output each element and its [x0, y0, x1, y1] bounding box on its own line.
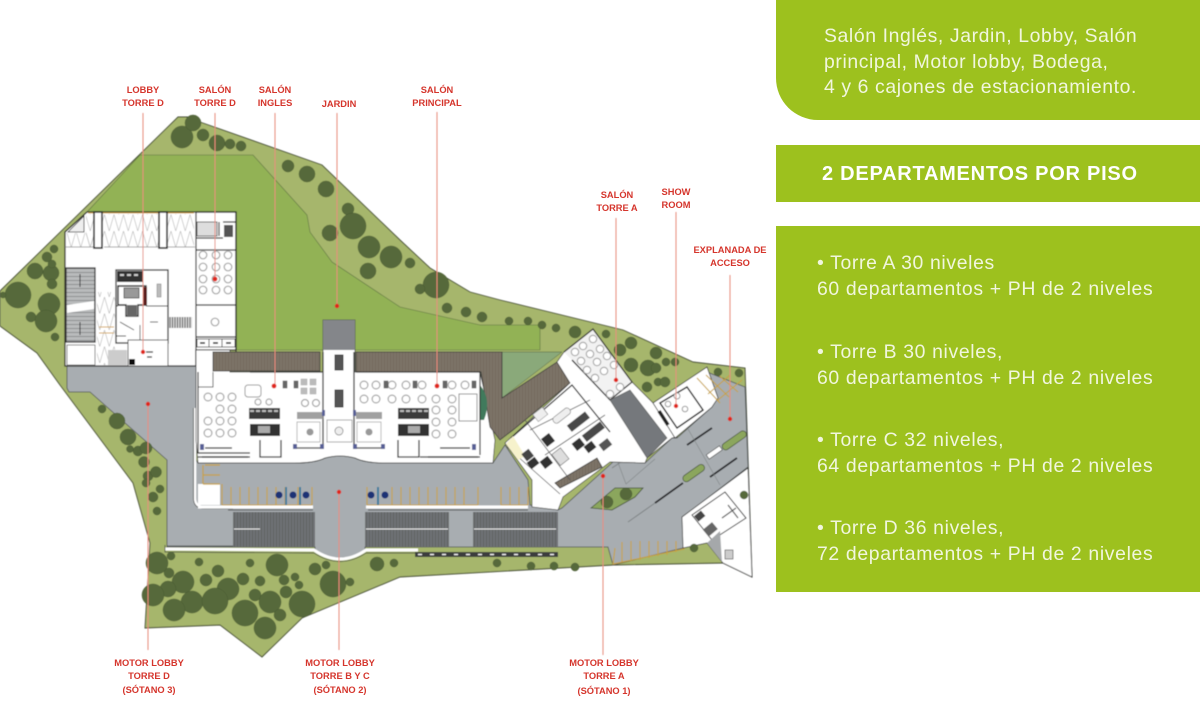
- south-east building: [682, 468, 752, 577]
- leader lines: [143, 112, 730, 655]
- label: motor lobby torre B y C: (SÓTANO 2): [313, 684, 367, 695]
- tower A: 60 departamentos + PH de 2 niveles: [817, 278, 1153, 300]
- lawn: east patch: [502, 352, 562, 398]
- label: motor lobby torre D: (SÓTANO 3): [122, 684, 176, 695]
- amenities text: Salón Inglés, Jardin, Lobby, Salón: [824, 25, 1137, 47]
- central building: [196, 320, 570, 463]
- tower D: 72 departamentos + PH de 2 niveles: [817, 543, 1153, 565]
- heading band: [776, 145, 1200, 202]
- plan labels: [114, 84, 767, 696]
- label: lobby torre D: LOBBY: [127, 85, 159, 95]
- label: salon ingles: SALÓN: [259, 85, 291, 95]
- label: motor lobby torre B y C: MOTOR LOBBY: [305, 658, 375, 668]
- label: salon principal: PRINCIPAL: [412, 98, 462, 108]
- parking bands: [198, 415, 737, 564]
- show room building: [653, 367, 742, 438]
- amenities text: 4 y 6 cajones de estacionamiento.: [824, 76, 1137, 98]
- panel: amenities: [776, 0, 1200, 120]
- lawn: jardin: [87, 155, 540, 350]
- label: motor lobby torre D: TORRE D: [128, 671, 170, 681]
- road and parking pavement: [67, 366, 748, 565]
- label: show room: ROOM: [662, 200, 691, 210]
- label: show room: SHOW: [662, 187, 690, 197]
- heading text: 2 DEPARTAMENTOS POR PISO: [822, 163, 1138, 185]
- label: salon torre D: SALÓN: [199, 85, 231, 95]
- label: motor lobby torre B y C: TORRE B Y C: [310, 671, 370, 681]
- label: explanada de acceso: ACCESO: [710, 258, 750, 268]
- label: salon torre A: SALÓN: [601, 190, 633, 200]
- label: motor lobby torre A: MOTOR LOBBY: [569, 658, 639, 668]
- tower B: [817, 341, 1153, 389]
- label: salon ingles: INGLES: [258, 98, 292, 108]
- tower C: 64 departamentos + PH de 2 niveles: [817, 455, 1153, 477]
- tower D: • Torre D 36 niveles,: [817, 517, 1004, 539]
- site plan: [0, 84, 767, 696]
- tower B: • Torre B 30 niveles,: [817, 341, 1003, 363]
- label: motor lobby torre A: TORRE A: [583, 671, 625, 681]
- label: salon torre D: TORRE D: [194, 98, 236, 108]
- trees: [0, 115, 748, 639]
- panel: towers: [776, 226, 1200, 592]
- tower D building: [65, 212, 236, 366]
- amenities text: [824, 25, 1137, 98]
- tower C: [817, 429, 1153, 477]
- label: salon principal: SALÓN: [421, 85, 453, 95]
- tower C: • Torre C 32 niveles,: [817, 429, 1004, 451]
- label: motor lobby torre A: (SÓTANO 1): [577, 685, 631, 696]
- tower B: 60 departamentos + PH de 2 niveles: [817, 367, 1153, 389]
- label: salon torre A: TORRE A: [596, 203, 638, 213]
- tower A: [817, 252, 1153, 300]
- amenities text: principal, Motor lobby, Bodega,: [824, 50, 1108, 72]
- tower A: • Torre A 30 niveles: [817, 252, 995, 274]
- tower A building: [505, 329, 677, 510]
- label: lobby torre D: TORRE D: [122, 98, 164, 108]
- location markers: [141, 277, 732, 494]
- landscaped site ground: [0, 117, 752, 657]
- label: motor lobby torre D: MOTOR LOBBY: [114, 658, 184, 668]
- road islands: [591, 430, 748, 510]
- label: jardin: JARDIN: [322, 99, 357, 109]
- tower D: [817, 517, 1153, 565]
- label: explanada de acceso: EXPLANADA DE: [693, 245, 767, 255]
